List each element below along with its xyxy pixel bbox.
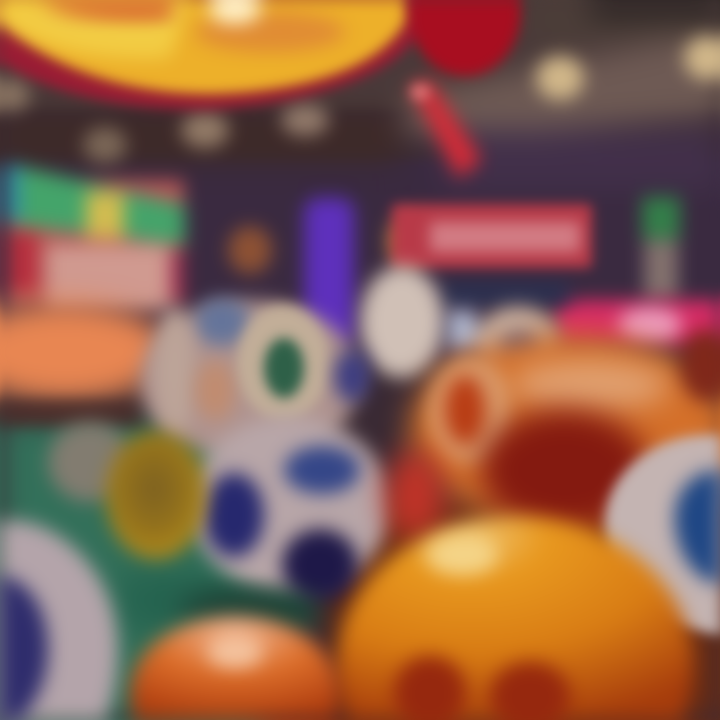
- colour board left: [6, 165, 185, 310]
- red banner: [392, 204, 592, 268]
- ceiling lights: [0, 36, 720, 163]
- large orange ball front: [337, 516, 693, 720]
- white-purple ball left: [0, 520, 118, 720]
- orange figure: [228, 226, 272, 274]
- pink strip: [556, 300, 720, 346]
- red lantern: [410, 0, 521, 178]
- yellow chip: [106, 431, 206, 559]
- stacked white chips: [140, 298, 370, 460]
- white chip stack front: [48, 417, 390, 601]
- orange table left: [0, 302, 170, 424]
- white-blue ball right: [605, 435, 720, 635]
- orange-red blurred mass right: [385, 329, 720, 540]
- white figure: [360, 266, 444, 378]
- green sign: [642, 197, 680, 300]
- shadow under chips: [180, 592, 320, 628]
- blue-white chip right: [448, 306, 560, 374]
- orange ball bottom: [130, 616, 340, 720]
- purple column: [304, 198, 354, 348]
- ceiling band: [0, 0, 720, 190]
- yellow overhead ring: [0, 0, 420, 109]
- dark band under banner: [440, 282, 570, 306]
- orange head: [388, 216, 428, 268]
